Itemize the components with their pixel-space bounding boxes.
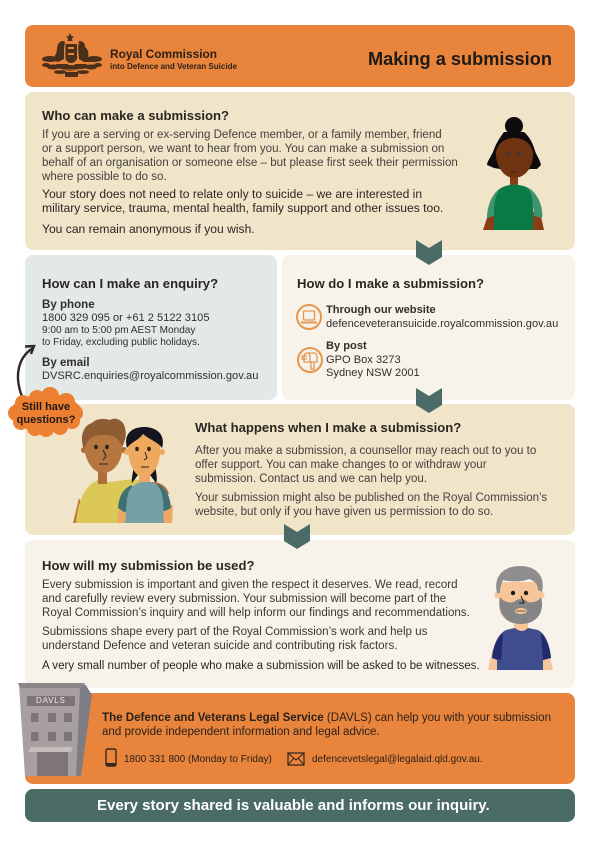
callout shape (8, 387, 83, 437)
text block: shape (42, 626, 427, 652)
panel: enquiry (25, 255, 277, 400)
text block: hours: to Friday, excluding public holidays. (42, 337, 200, 348)
callout text: Still have (22, 401, 70, 413)
heading: How can I make an enquiry? (42, 276, 218, 291)
text block: intro (42, 129, 458, 183)
logo subtitle: into Defence and Veteran Suicide (110, 62, 237, 71)
icon: mailbox (297, 347, 323, 373)
panel: how to submit (282, 255, 575, 400)
text block: witnesses: A very small number of people who make a submission will be asked to be witnesses. (42, 660, 480, 672)
callout text: questions? (17, 414, 75, 426)
text block: intro: where possible to do so. (42, 171, 167, 183)
icon: coat of arms (42, 33, 102, 77)
text block: hours: 9:00 am to 5:00 pm AEST Monday (42, 325, 195, 336)
text block: email: DVSRC.enquiries@royalcommission.gov.au (42, 370, 258, 382)
icon: DAVLS building (18, 683, 92, 776)
panel: how submission is used (25, 540, 575, 688)
heading: Who can make a submission? (42, 108, 229, 123)
icon: older man (488, 566, 553, 670)
banner text: Every story shared is valuable and informs our inquiry. (97, 797, 490, 814)
text block: importance: Every submission is important and given the respect it deserves. We read, record (42, 579, 458, 591)
text block: after: submission. Contact us and we can help you. (195, 473, 427, 485)
text block: DAVLS: and provide independent information and legal advice. (102, 726, 380, 738)
icon: phone (105, 748, 117, 767)
text block: intro: or a support person, we want to hear from you. You can make a submission on (42, 143, 444, 155)
logo wordmark: Royal Commission (110, 47, 217, 61)
subheading: website: Through our website (326, 304, 436, 316)
arrow: down chevron 2 (416, 388, 442, 413)
text block: shape: understand Defence and veteran suicide and contributing risk factors. (42, 640, 397, 652)
text block: importance: and carefully review every submission. Your submission will become part of the (42, 593, 446, 605)
panel: legal service (25, 693, 575, 784)
text block: DAVLS: The Defence and Veterans Legal Service (DAVLS) can help you with your submission (102, 712, 551, 724)
text block: DAVLS (102, 712, 551, 738)
callout text (17, 401, 75, 426)
callout: still have questions (8, 387, 83, 437)
icon: envelope (287, 752, 305, 766)
text block: published: website, but only if you have given us permission to do so. (195, 506, 493, 518)
text block: importance (42, 579, 470, 619)
panel: what happens (25, 404, 575, 535)
text block: importance: Royal Commission’s inquiry and will help inform our findings and recommendations. (42, 607, 470, 619)
panel: who can make a submission (25, 92, 575, 250)
text block: after (195, 445, 536, 485)
icon: two people (73, 418, 173, 523)
text block: website: defenceveteransuicide.royalcommission.gov.au (326, 318, 558, 330)
arrow: down chevron 3 (284, 524, 310, 549)
text block: after: After you make a submission, a counsellor may reach out to you to (195, 445, 536, 457)
text block: post (326, 340, 420, 379)
subheading: by email: By email (42, 357, 90, 369)
text block: after: offer support. You can make changes to or withdraw your (195, 459, 487, 471)
text block: published: Your submission might also be published on the Royal Commission’s (195, 492, 547, 504)
heading: What happens when I make a submission? (195, 420, 461, 435)
arrow: curved to enquiry (16, 344, 36, 396)
text block: anonymous: You can remain anonymous if you wish. (42, 222, 255, 236)
subheading: by phone: By phone (42, 299, 95, 311)
text block: topics: Your story does not need to relate only to suicide – we are interested in (42, 187, 422, 201)
text block: intro: If you are a serving or ex-serving Defence member, or a family member, friend (42, 129, 442, 141)
heading: How will my submission be used? (42, 558, 254, 573)
text block: post: By post (326, 340, 367, 352)
arrow: down chevron 1 (416, 240, 442, 265)
text block: post: GPO Box 3273 (326, 354, 401, 366)
text: phone number: 1800 331 800 (Monday to Friday) (124, 754, 272, 765)
text: email: defencevetslegal@legalaid.qld.gov.au. (312, 754, 483, 765)
panel: header (25, 25, 575, 87)
title: Making a submission (368, 49, 552, 69)
text block: phone: 1800 329 095 or +61 2 5122 3105 (42, 312, 209, 324)
text block: hours (42, 325, 200, 348)
text block: published (195, 492, 547, 518)
text block: post: Sydney NSW 2001 (326, 367, 420, 379)
text block: topics (42, 187, 443, 215)
text block: topics: military service, trauma, mental health, family support and other issues too. (42, 201, 443, 215)
text block: shape: Submissions shape every part of the Royal Commission’s work and help us (42, 626, 427, 638)
icon: woman in green shirt (483, 117, 544, 230)
heading: How do I make a submission? (297, 276, 484, 291)
banner (25, 789, 575, 822)
building sign text: DAVLS (36, 696, 66, 705)
text block: intro: behalf of an organisation or someone else – but please first seek their permission (42, 157, 458, 169)
icon: laptop (296, 304, 322, 330)
